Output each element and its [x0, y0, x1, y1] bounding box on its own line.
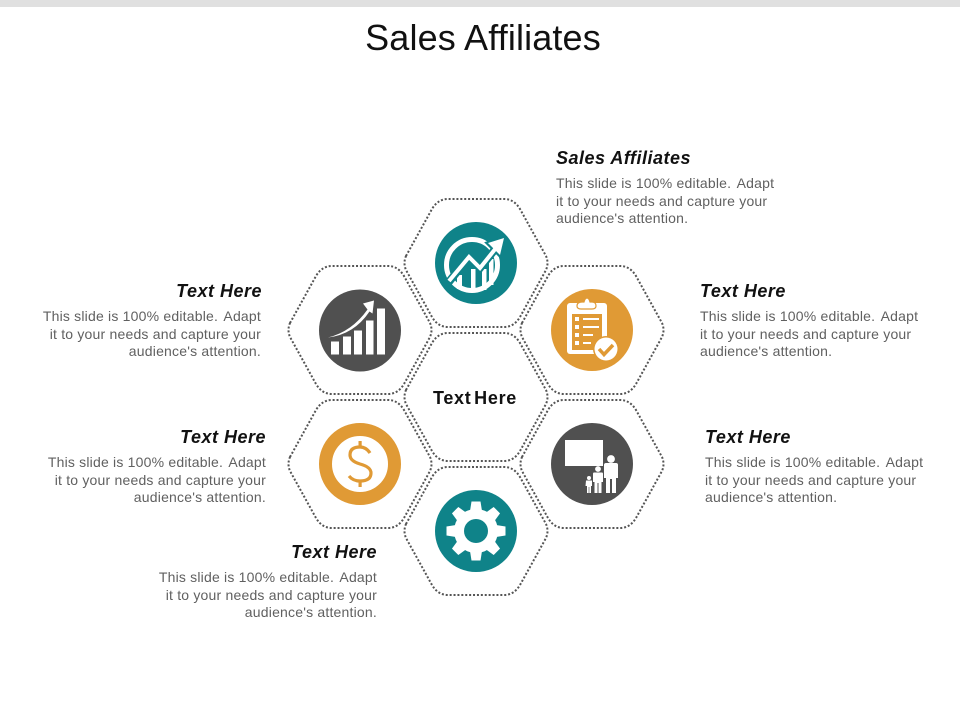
- text block: lower left: This slide is 100% editable. Adapt: [48, 454, 266, 470]
- text block: bottom: This slide is 100% editable. Adapt: [159, 569, 377, 585]
- text block: lower right: Text Here: [705, 427, 791, 447]
- text block: upper left: audience's attention.: [129, 343, 261, 359]
- text block: upper right: audience's attention.: [700, 343, 832, 359]
- text block: Sales Affiliates: it to your needs and capture your: [556, 192, 767, 208]
- text block: lower left: it to your needs and capture your: [55, 472, 266, 488]
- text block: lower right: This slide is 100% editable. Adapt: [705, 454, 923, 470]
- text block: bottom: it to your needs and capture your: [166, 586, 377, 602]
- text block: upper left: Text Here: [176, 281, 262, 301]
- text block: upper left: This slide is 100% editable. Adapt: [43, 308, 261, 324]
- text block: Sales Affiliates: This slide is 100% editable. Adapt: [556, 175, 774, 191]
- text block: upper right: This slide is 100% editable. Adapt: [700, 308, 918, 324]
- text block: lower right: [705, 427, 923, 505]
- icon: growth chart in teal circle: [435, 222, 517, 304]
- text block: bottom: Text Here: [291, 542, 377, 562]
- icon: bar chart with arrow in dark circle: [319, 290, 401, 372]
- icon: gear in teal circle: [435, 490, 517, 572]
- text block: upper right: [700, 281, 918, 359]
- text block: lower left: audience's attention.: [134, 489, 266, 505]
- text block: lower left: [48, 427, 266, 505]
- text block: lower right: audience's attention.: [705, 489, 837, 505]
- icon: presentation board with people in dark circle: [551, 423, 633, 505]
- text block: Sales Affiliates: audience's attention.: [556, 210, 688, 226]
- text block: Sales Affiliates: [556, 148, 774, 226]
- text block: lower right: it to your needs and capture your: [705, 472, 916, 488]
- title: Sales Affiliates: [365, 17, 601, 58]
- text block: bottom: [159, 542, 377, 620]
- text block: Sales Affiliates: Sales Affiliates: [556, 148, 691, 168]
- text block: bottom: audience's attention.: [245, 604, 377, 620]
- center hexagon label: Text Here: [433, 388, 517, 408]
- top bar: [0, 0, 960, 7]
- text block: upper left: it to your needs and capture your: [50, 326, 261, 342]
- text block: upper right: Text Here: [700, 281, 786, 301]
- text block: upper right: it to your needs and capture your: [700, 326, 911, 342]
- text block: upper left: [43, 281, 262, 359]
- icon: clipboard checklist in orange circle: [551, 289, 633, 371]
- text block: lower left: Text Here: [180, 427, 266, 447]
- icon: dollar coin in orange circle: [326, 430, 394, 498]
